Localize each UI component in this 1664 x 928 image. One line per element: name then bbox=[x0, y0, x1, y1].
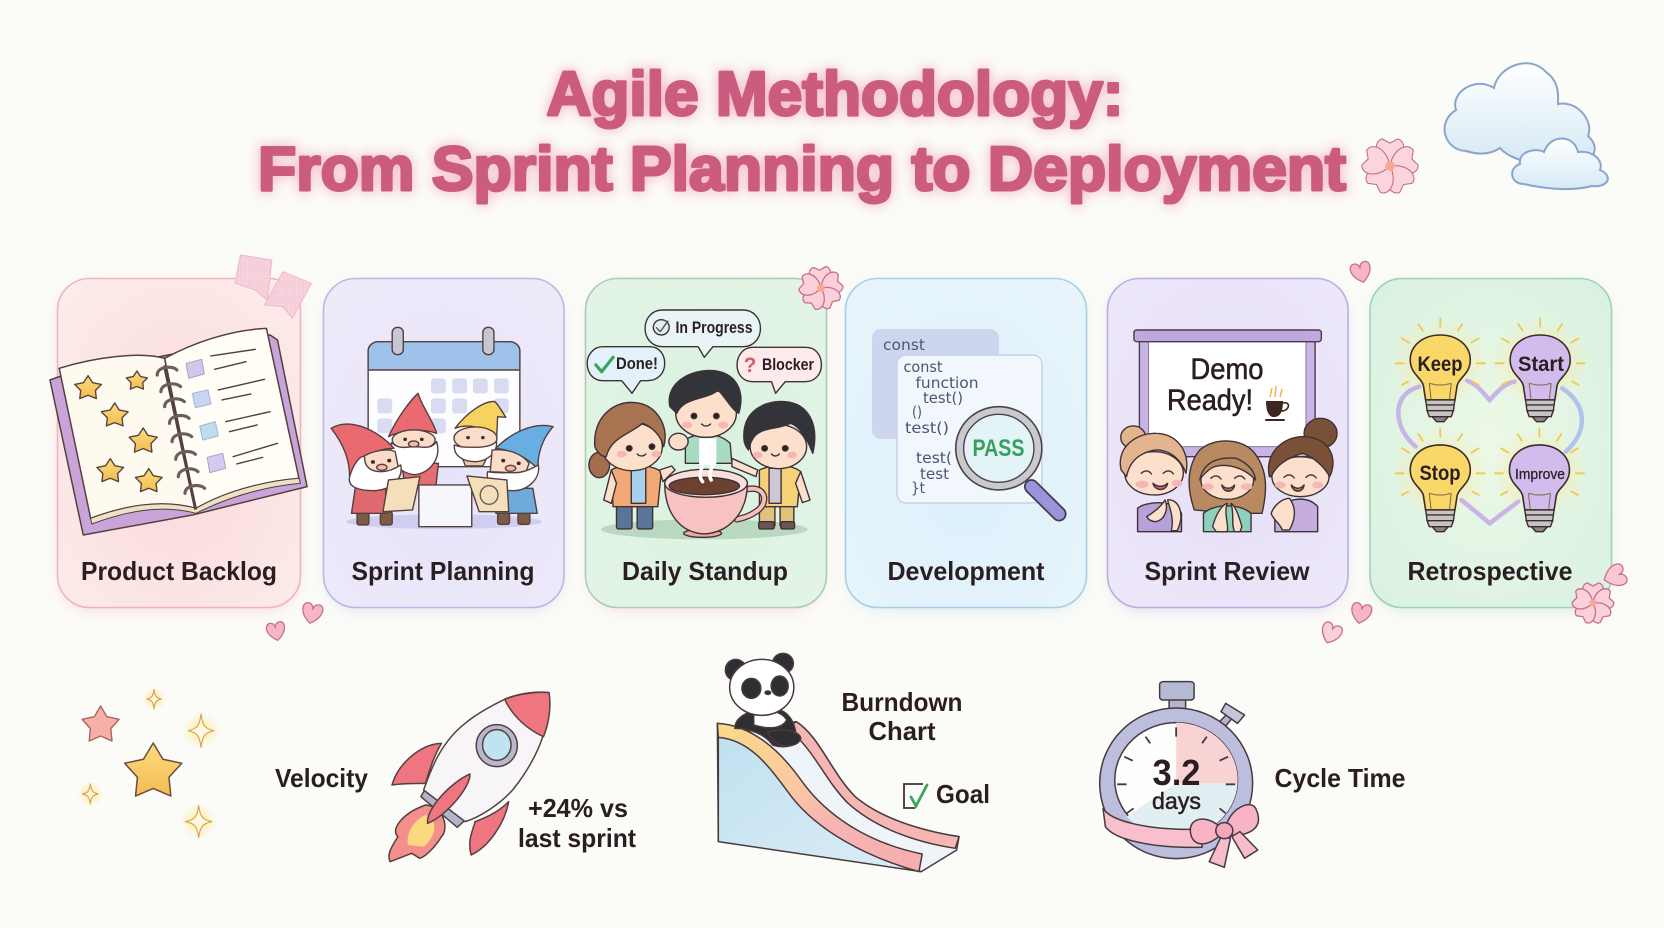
icon: coffee bbox=[1265, 386, 1288, 421]
label bbox=[842, 687, 962, 746]
back red gnome bbox=[388, 393, 438, 487]
bubble: Blocker: ? bbox=[744, 354, 756, 377]
code windows: test bbox=[920, 465, 949, 483]
illustration: three kids with coffee bbox=[589, 370, 815, 539]
icon: bunting bbox=[235, 255, 312, 318]
stopwatch reading: 3.2 bbox=[1152, 752, 1200, 793]
icon: stopwatch bbox=[1100, 682, 1258, 867]
code windows: () bbox=[912, 403, 922, 421]
stat: +24% vs last sprint: +24% vs bbox=[528, 793, 628, 823]
middle girl bbox=[1189, 441, 1266, 532]
bubble: Done: Done! bbox=[616, 354, 658, 373]
middle boy bbox=[669, 370, 741, 465]
label: Product Backlog: Product Backlog bbox=[81, 556, 277, 586]
label: Retrospective: Retrospective bbox=[1408, 556, 1572, 586]
panda bbox=[725, 653, 801, 747]
bulb label: Start: Start bbox=[1518, 353, 1564, 376]
decoration: hearts and blossoms bbox=[266, 260, 1628, 646]
stat: +24% vs last sprint bbox=[518, 793, 636, 853]
icon: calendar with gnomes bbox=[331, 327, 553, 529]
metric: Velocity bbox=[78, 687, 636, 862]
panel: Sprint Planning bbox=[324, 278, 564, 610]
bubble: Blocker: Blocker bbox=[762, 355, 814, 374]
icon: rocket bbox=[389, 692, 550, 862]
panel: Development bbox=[846, 278, 1086, 610]
title bbox=[258, 60, 1346, 204]
icon: clouds bbox=[1445, 63, 1608, 189]
left girl bbox=[1120, 426, 1187, 532]
icon: open notebook with stars bbox=[50, 328, 307, 535]
label: Sprint Review: Sprint Review bbox=[1144, 556, 1310, 586]
stopwatch reading bbox=[1152, 752, 1201, 814]
code windows bbox=[872, 329, 1042, 503]
icon: stars and sparkles bbox=[78, 687, 220, 839]
label: Sprint Planning: Sprint Planning bbox=[352, 556, 534, 586]
yellow gnome bbox=[454, 402, 506, 466]
code windows: }t bbox=[911, 479, 925, 497]
title: Agile Methodology: bbox=[546, 60, 1124, 129]
title: Agile Methodology: bbox=[546, 60, 1124, 129]
code windows: function bbox=[916, 374, 978, 392]
diagram: four lightbulbs in heart bbox=[1393, 318, 1588, 532]
goal check: Goal bbox=[936, 779, 990, 809]
metric: Burndown Chart bbox=[717, 653, 990, 872]
bubble: Blocker bbox=[737, 347, 821, 393]
left red gnome bbox=[331, 424, 420, 525]
label: Daily Standup: Daily Standup bbox=[622, 556, 788, 586]
code windows: const bbox=[904, 358, 943, 376]
icon: magnifier PASS bbox=[956, 407, 1059, 514]
stopwatch reading: days bbox=[1152, 788, 1201, 814]
panel: Product Backlog bbox=[50, 255, 312, 610]
panel: Daily Standup bbox=[586, 278, 826, 610]
code windows: const bbox=[883, 336, 925, 354]
panel: Retrospective bbox=[1370, 278, 1612, 610]
code windows: test() bbox=[905, 419, 949, 437]
left girl bbox=[589, 402, 675, 529]
right girl bbox=[1269, 418, 1337, 532]
bubble: Done bbox=[587, 347, 665, 393]
illustration: demo screen bbox=[1134, 330, 1321, 457]
label: Development: Development bbox=[888, 556, 1045, 586]
label: Cycle Time bbox=[1274, 763, 1406, 793]
icon: title sakura bbox=[1360, 139, 1420, 196]
panel: Sprint Review bbox=[1108, 278, 1348, 610]
label: Chart bbox=[868, 716, 936, 746]
bubble: In Progress bbox=[645, 310, 760, 357]
coffee cup bbox=[665, 458, 764, 537]
stat: +24% vs last sprint: last sprint bbox=[518, 823, 636, 853]
illustration: three cheering girls bbox=[1120, 418, 1337, 532]
goal check bbox=[904, 779, 990, 809]
code windows: test() bbox=[923, 389, 963, 407]
bulb label: Keep: Keep bbox=[1418, 353, 1462, 376]
bubble: In Progress: In Progress bbox=[676, 318, 752, 337]
title: From Sprint Planning to Deployment bbox=[258, 135, 1346, 204]
blue gnome bbox=[467, 425, 553, 524]
label: Velocity bbox=[275, 763, 369, 793]
right boy bbox=[732, 401, 815, 529]
icon: panda on slide bbox=[717, 653, 959, 872]
illustration: demo screen: Demo bbox=[1190, 353, 1264, 386]
bulb label: Stop: Stop bbox=[1420, 462, 1460, 485]
label: Burndown bbox=[842, 687, 962, 717]
code windows: test( bbox=[916, 449, 952, 467]
metric: Cycle Time bbox=[1100, 682, 1406, 867]
title: From Sprint Planning to Deployment bbox=[258, 135, 1346, 204]
icon: magnifier PASS: PASS bbox=[972, 435, 1024, 462]
illustration: demo screen: Ready! bbox=[1167, 384, 1253, 417]
bulb label: Improve: Improve bbox=[1515, 466, 1565, 483]
